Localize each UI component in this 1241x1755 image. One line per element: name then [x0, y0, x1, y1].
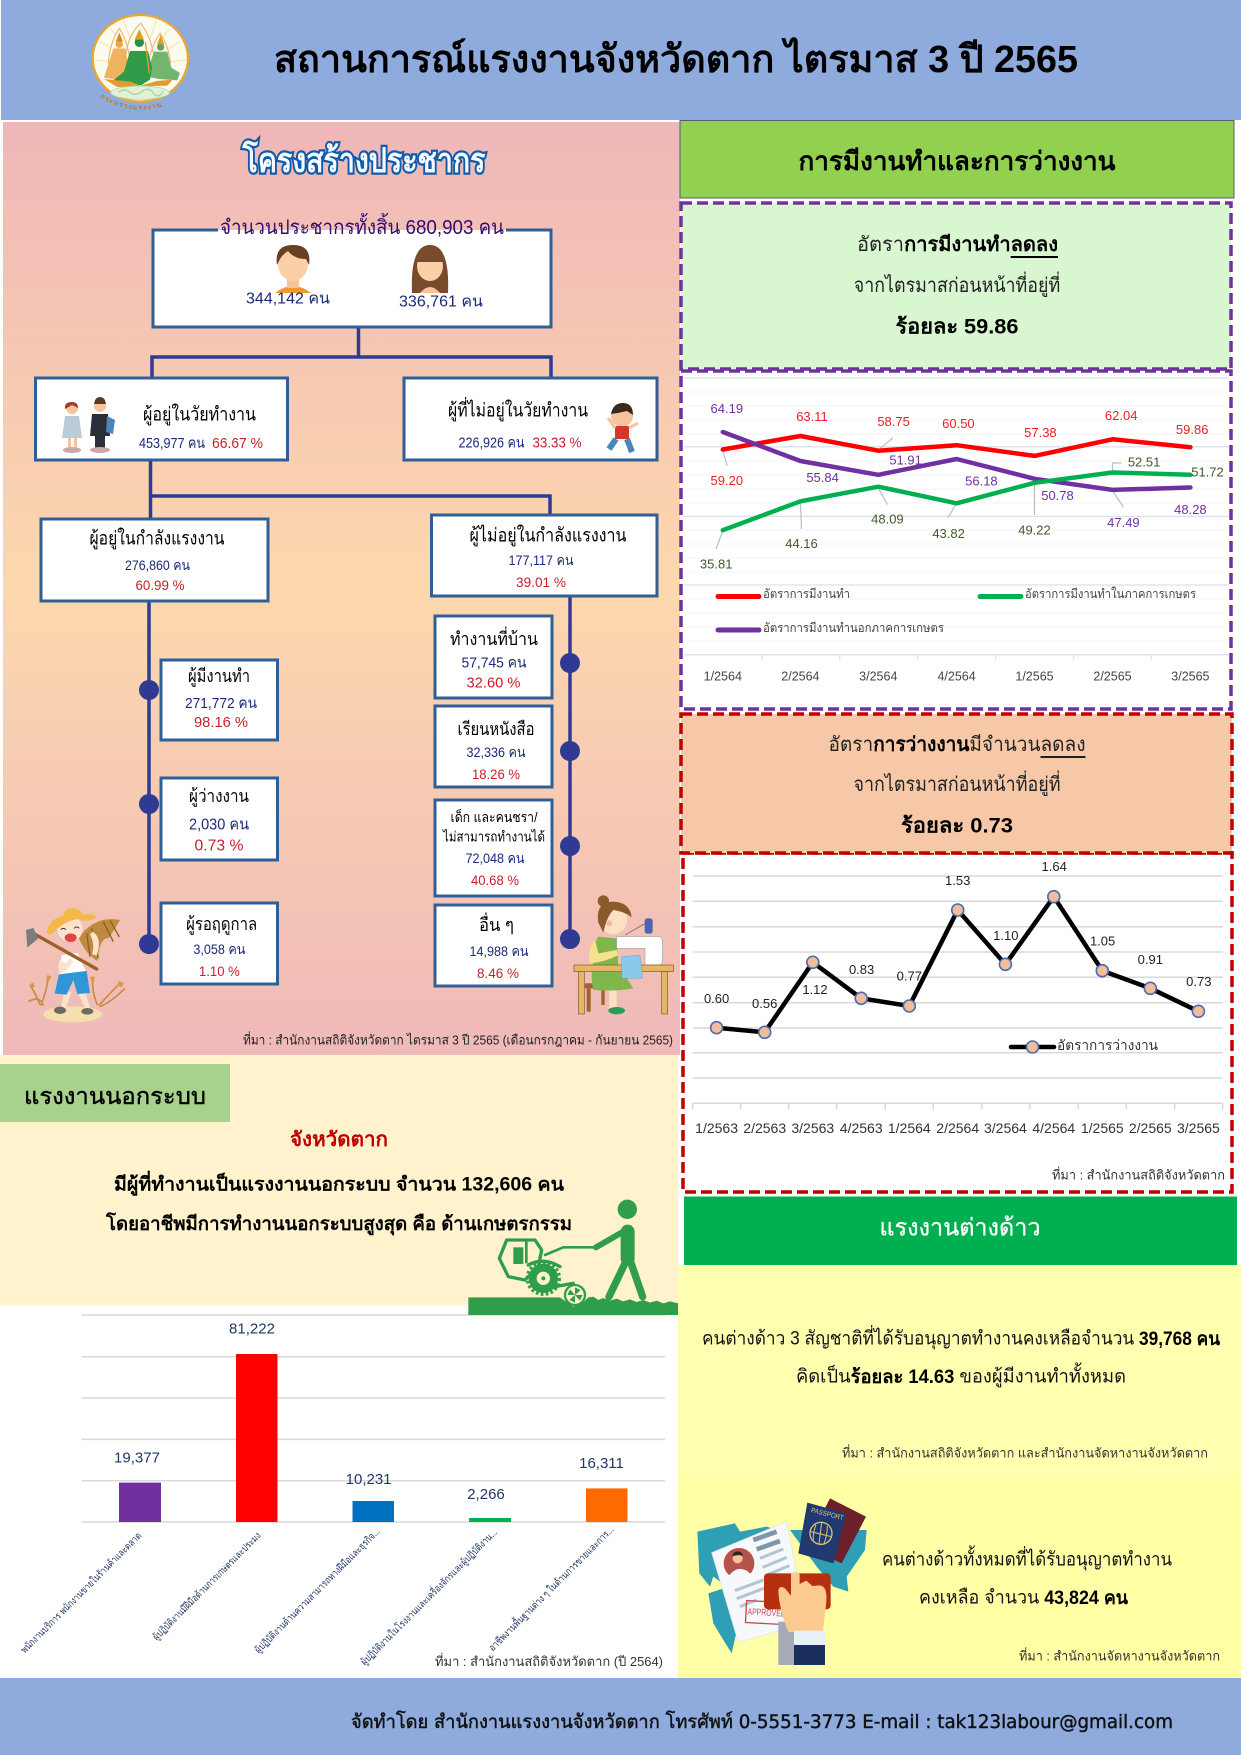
- data labels: agricultural: 51.72: [1191, 464, 1224, 480]
- panel: unemployment rate summary: อัตราการว่างงานมีจำนวนลดลง: [828, 734, 1086, 756]
- footer band: [0, 1678, 1241, 1755]
- data labels: 0.73: [1186, 974, 1211, 989]
- icon: boy: [275, 245, 311, 293]
- data labels: employment rate: 62.04: [1105, 408, 1137, 423]
- text: working age: [139, 404, 263, 452]
- data labels: non-agricultural: 47.49: [1107, 515, 1140, 530]
- text: female count: 336,761 คน: [399, 294, 483, 310]
- text: informal summary: โดยอาชีพมีการทำงานนอกระบบสูงสุด คือ ด้านเกษตรกรรม: [105, 1212, 572, 1236]
- data labels: 1.53: [945, 873, 970, 888]
- data labels: agricultural: 44.16: [785, 536, 818, 551]
- x axis labels: 2/2565: [1129, 1120, 1172, 1136]
- bars: [119, 1354, 628, 1522]
- icon: ministry of labour seal: กระทรวงแรงงาน: [100, 94, 162, 110]
- occupation axis labels: ผู้ปฏิบัติงานในโรงงานและเครื่องจักรและผู้ปฏิบัติงาน...: [357, 1525, 500, 1668]
- data labels: employment rate: [711, 408, 1208, 488]
- box: others: 14,988 คน: [470, 943, 529, 959]
- panel: employment line chart: [681, 371, 1231, 709]
- source note: ที่มา : สำนักงานจัดหางานจังหวัดตาก: [1019, 1648, 1220, 1664]
- x axis labels: 1/2564: [888, 1120, 931, 1136]
- panel: informal labour: [0, 1055, 678, 1305]
- panel: foreign workers heading: [684, 1196, 1237, 1265]
- box: children and elderly: 40.68 %: [471, 872, 519, 888]
- legend: อัตราการมีงานทำนอกภาคการเกษตร: [763, 621, 944, 635]
- x axis labels: 2/2563: [743, 1120, 786, 1136]
- occupation axis labels: ผู้ปฏิบัติงานด้านความสามารถทางฝีมือและธุรกิจ...: [252, 1526, 383, 1656]
- text: working age: 66.67 %: [212, 435, 263, 452]
- data labels: 1.64: [1042, 859, 1067, 874]
- box: employed: 98.16 %: [194, 714, 248, 731]
- x axis labels: 3/2564: [984, 1120, 1027, 1136]
- source note: ที่มา : สำนักงานสถิติจังหวัดตาก ไตรมาส 3 ปี 2565 (เดือนกรกฎาคม - กันยายน 2565): [243, 1032, 673, 1048]
- bar value labels: [114, 1320, 624, 1503]
- box: studying: 32,336 คน: [466, 744, 526, 760]
- legend: อัตราการมีงานทำในภาคการเกษตร: [1025, 587, 1196, 601]
- data labels: agricultural: 35.81: [700, 557, 732, 572]
- panel: informal labour bar chart: [0, 1305, 678, 1678]
- box: seasonal: ผู้รอฤดูกาล: [186, 914, 257, 935]
- line: non-agricultural employment: [723, 432, 1190, 490]
- x axis labels: 4/2564: [1032, 1120, 1075, 1136]
- bar value labels: 2,266: [467, 1486, 505, 1503]
- panel: employment rate summary: ร้อยละ 59.86: [896, 314, 1018, 338]
- occupation axis labels: อาชีพงานพื้นฐานต่าง ๆ ในด้านการขายและการ...: [485, 1522, 617, 1654]
- box: employed: ผู้มีงานทำ: [188, 666, 250, 687]
- data labels: agricultural: 49.22: [1018, 522, 1051, 537]
- icon: passport and approval stamp: APPROVED: [747, 1607, 786, 1619]
- data labels: employment rate: 60.50: [942, 416, 975, 431]
- label: total population: จำนวนประชากรทั้งสิ้น 680,903 คน: [220, 213, 504, 239]
- data labels: employment rate: 63.11: [796, 409, 828, 424]
- source note: ที่มา : สำนักงานสถิติจังหวัดตาก: [1052, 1166, 1225, 1182]
- panel: population structure: [3, 122, 680, 1055]
- data labels: 1.12: [802, 982, 828, 997]
- panel: foreign workers: [678, 1265, 1241, 1678]
- data labels: employment rate: 58.75: [877, 414, 910, 429]
- box: studying: เรียนหนังสือ: [458, 719, 534, 739]
- box: employed: 271,772 คน: [185, 695, 257, 712]
- box: children and elderly: 72,048 คน: [466, 850, 525, 866]
- leader lines: [716, 438, 1123, 549]
- box: studying: [435, 706, 552, 787]
- box: unemployed: [161, 778, 278, 860]
- text: non working age: [448, 396, 588, 452]
- data labels: non-agricultural: 55.84: [806, 470, 839, 485]
- data labels: 0.60: [704, 991, 729, 1006]
- text: three nationalities: คิดเป็นร้อยละ 14.63 ของผู้มีงานทำทั้งหมด: [796, 1362, 1126, 1388]
- text: province: จังหวัดตาก: [290, 1129, 388, 1151]
- box: children and elderly: เด็ก และคนชรา/: [450, 808, 538, 825]
- x axis labels: 4/2563: [840, 1120, 883, 1136]
- icon: office workers: [62, 397, 115, 453]
- data labels: employment rate: 57.38: [1024, 425, 1057, 440]
- source note: ที่มา : สำนักงานสถิติจังหวัดตาก และสำนักงานจัดหางานจังหวัดตาก: [842, 1444, 1208, 1460]
- heading: informal labour: แรงงานนอกระบบ: [24, 1083, 206, 1109]
- x axis labels: 1/2565: [1081, 1120, 1124, 1136]
- data labels: non-agricultural: 50.78: [1041, 488, 1074, 503]
- line: unemployment rate: [717, 897, 1198, 1032]
- data labels: 1.05: [1090, 934, 1115, 948]
- icon: passport and approval stamp: PASSPORT: [810, 1507, 845, 1522]
- data labels: agricultural: [700, 455, 1224, 572]
- box: home work: [435, 616, 552, 698]
- icon: sewing woman: [574, 895, 673, 1014]
- x axis labels: 3/2564: [859, 670, 897, 684]
- x axis labels: [695, 1120, 1220, 1136]
- box: in labour force: 276,860 คน: [125, 557, 190, 573]
- box: seasonal: 1.10 %: [199, 963, 240, 979]
- x axis labels: 3/2563: [791, 1120, 834, 1136]
- occupation axis labels: ผู้ปฏิบัติงานมีฝีมือด้านการเกษตรและประมง: [150, 1530, 264, 1643]
- data labels: agricultural: 48.09: [871, 512, 904, 527]
- panel: foreign workers heading: แรงงานต่างด้าว: [880, 1214, 1040, 1242]
- x axis labels: 2/2564: [936, 1120, 979, 1136]
- box: seasonal: 3,058 คน: [193, 941, 246, 957]
- x axis labels: 2/2564: [781, 670, 820, 684]
- box: home work: 57,745 คน: [462, 654, 526, 672]
- panel: employment rate summary: อัตราการมีงานทำลดลง: [857, 233, 1058, 256]
- icon: ministry of labour seal: [92, 14, 190, 110]
- text: three nationalities: คนต่างด้าว 3 สัญชาติที่ได้รับอนุญาตทำงานคงเหลือจำนวน 39,768 คน: [702, 1324, 1220, 1350]
- box: in labour force: 60.99 %: [136, 577, 184, 593]
- box: unemployed: ผู้ว่างงาน: [189, 786, 249, 807]
- box: not in labour force: [432, 515, 657, 596]
- bar value labels: 16,311: [579, 1455, 624, 1472]
- text: working age: 453,977 คน: [139, 435, 205, 452]
- box: not in labour force: 177,117 คน: [508, 552, 574, 568]
- x axis labels: [704, 670, 1210, 684]
- data labels: 0.77: [897, 968, 922, 984]
- icon: walking tractor: [468, 1200, 678, 1315]
- bar value labels: 81,222: [229, 1320, 275, 1338]
- bar value labels: 19,377: [114, 1450, 160, 1466]
- box: not in labour force: ผู้ไม่อยู่ในกำลังแรงงาน: [470, 524, 627, 546]
- data labels: agricultural: 43.82: [932, 526, 965, 541]
- text: non working age: 33.33 %: [532, 434, 582, 452]
- icon: farmer: [26, 908, 125, 1022]
- legend: [718, 587, 1196, 635]
- text: male count: 344,142 คน: [246, 290, 330, 308]
- box: others: 8.46 %: [477, 965, 519, 981]
- panel: employment heading: การมีงานทำและการว่างงาน: [798, 146, 1116, 176]
- box: employed: [161, 660, 278, 740]
- occupation axis labels: [18, 1522, 617, 1668]
- text: informal summary: [105, 1170, 572, 1236]
- x axis labels: 1/2565: [1015, 670, 1054, 684]
- legend: [1011, 1037, 1158, 1053]
- text: non working age: 226,926 คน: [458, 434, 524, 452]
- panel: unemployment rate summary: ร้อยละ 0.73: [901, 814, 1013, 838]
- data labels: non-agricultural: 51.91: [889, 453, 922, 468]
- line: agricultural employment: [723, 472, 1190, 530]
- box: home work: 32.60 %: [466, 674, 520, 692]
- source note: ที่มา : สำนักงานสถิติจังหวัดตาก (ปี 2564): [435, 1653, 663, 1669]
- x axis labels: 1/2563: [695, 1120, 738, 1136]
- box: studying: 18.26 %: [472, 766, 520, 782]
- data labels: non-agricultural: [711, 401, 1207, 530]
- x axis labels: 1/2564: [704, 670, 742, 684]
- heading: informal labour: [0, 1064, 230, 1122]
- box: children and elderly: ไม่สามารถทำงานได้: [442, 828, 545, 844]
- bar value labels: 10,231: [346, 1471, 392, 1488]
- data labels: 0.83: [849, 962, 874, 977]
- data labels: non-agricultural: 48.28: [1174, 502, 1207, 517]
- title: สถานการณ์แรงงานจังหวัดตาก ไตรมาส 3 ปี 2565: [274, 37, 1078, 81]
- tree connector lines: [139, 327, 580, 954]
- text: non working age: ผู้ที่ไม่อยู่ในวัยทำงาน: [448, 396, 588, 422]
- text: all foreign workers: คงเหลือ จำนวน 43,824 คน: [919, 1588, 1128, 1608]
- data labels: 0.91: [1138, 952, 1163, 967]
- text: three nationalities: [702, 1324, 1220, 1388]
- box: children and elderly: [435, 800, 552, 896]
- x axis labels: 2/2565: [1093, 670, 1132, 684]
- box: others: [435, 905, 552, 986]
- data labels: 0.56: [752, 996, 777, 1011]
- text: working age: ผู้อยู่ในวัยทำงาน: [143, 404, 256, 426]
- icon: passport and approval stamp: [697, 1498, 867, 1665]
- panel: unemployment rate summary: [681, 714, 1232, 853]
- data labels: [704, 859, 1211, 1011]
- panel: unemployment rate summary: จากไตรมาสก่อนหน้าที่อยู่ที่: [854, 770, 1060, 797]
- heading: population structure: โครงสร้างประชากร: [242, 140, 486, 180]
- x axis labels: 3/2565: [1177, 1120, 1220, 1136]
- box: seasonal: [161, 903, 278, 984]
- text: informal summary: มีผู้ที่ทำงานเป็นแรงงานนอกระบบ จำนวน 132,606 คน: [114, 1170, 564, 1196]
- icon: girl: [412, 245, 448, 293]
- data labels: agricultural: 52.51: [1128, 455, 1160, 470]
- data labels: 1.10: [993, 928, 1018, 943]
- box: not in labour force: 39.01 %: [516, 574, 566, 590]
- occupation axis labels: พนักงานบริการ พนักงานขายในร้านค้าและตลาด: [18, 1530, 144, 1656]
- box: unemployed: 0.73 %: [194, 838, 244, 854]
- box: working age: [36, 378, 288, 460]
- box: non working age: [404, 378, 657, 460]
- x axis labels: 3/2565: [1171, 670, 1210, 684]
- text: all foreign workers: คนต่างด้าวทั้งหมดที่ได้รับอนุญาตทำงาน: [882, 1546, 1172, 1572]
- data labels: employment rate: 59.86: [1176, 422, 1208, 437]
- box: in labour force: [41, 519, 268, 601]
- footer band: จัดทำโดย สำนักงานแรงงานจังหวัดตาก โทรศัพท์ 0-5551-3773 E-mail : tak123labour@gmail.com: [351, 1710, 1173, 1733]
- legend: อัตราการว่างงาน: [1057, 1037, 1158, 1053]
- data markers: [711, 891, 1204, 1038]
- icon: running kid: [608, 403, 638, 452]
- header band: [1, 0, 1241, 120]
- box: others: อื่น ๆ: [479, 912, 514, 935]
- box: in labour force: ผู้อยู่ในกำลังแรงงาน: [90, 528, 225, 550]
- panel: employment rate summary: [681, 203, 1231, 369]
- data labels: non-agricultural: 64.19: [711, 401, 743, 416]
- panel: employment heading: [680, 120, 1234, 198]
- box: total population: [153, 213, 551, 327]
- line: employment rate: [723, 436, 1190, 456]
- panel: employment rate summary: จากไตรมาสก่อนหน้าที่อยู่ที่: [854, 271, 1060, 298]
- legend: อัตราการมีงานทำ: [763, 587, 850, 601]
- data labels: non-agricultural: 56.18: [965, 474, 998, 489]
- panel: unemployment chart: [683, 853, 1232, 1192]
- box: home work: ทำงานที่บ้าน: [450, 626, 538, 649]
- text: all foreign workers: [882, 1546, 1172, 1608]
- x axis labels: 4/2564: [937, 670, 976, 684]
- box: unemployed: 2,030 คน: [189, 816, 249, 834]
- data labels: employment rate: 59.20: [711, 473, 743, 488]
